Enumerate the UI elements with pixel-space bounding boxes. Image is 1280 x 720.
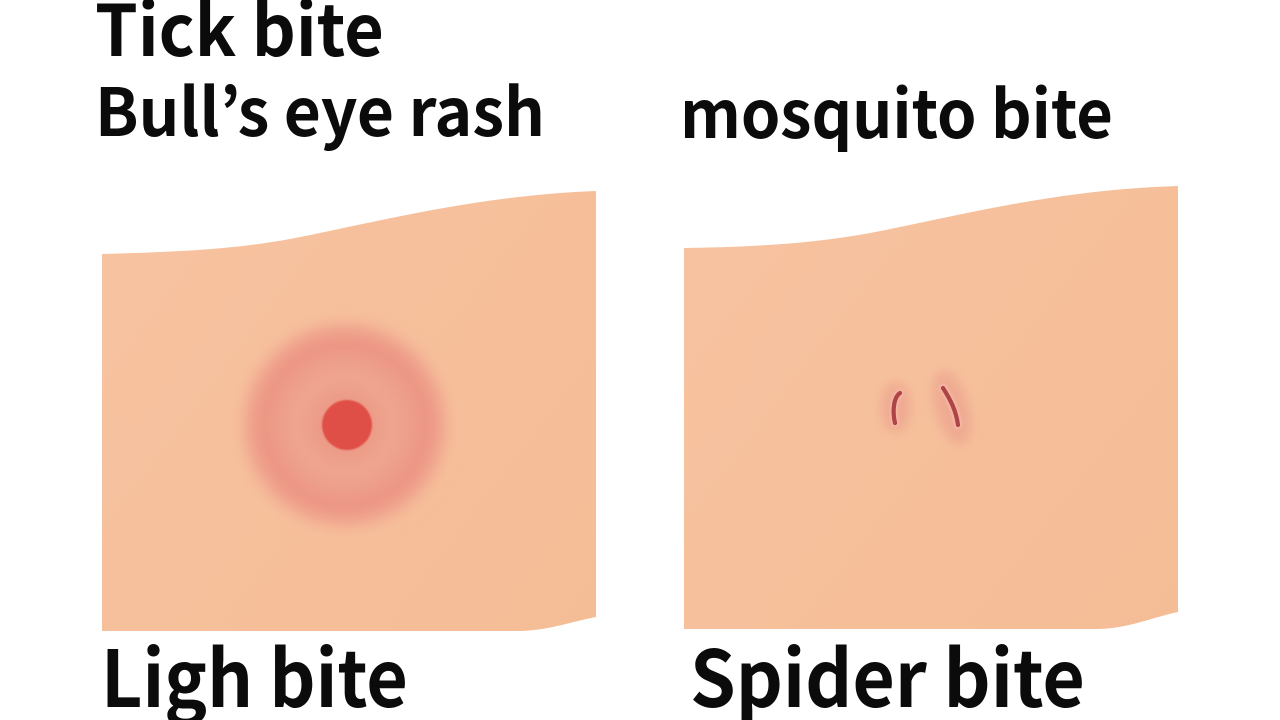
skin patch left [102, 191, 596, 631]
right bite swelling [925, 367, 979, 449]
skin patch right [684, 186, 1178, 629]
bull's eye rash [231, 311, 459, 539]
heading: Bull's eye rash: Bull’s eye rash [95, 60, 545, 156]
left bite mark [894, 393, 900, 423]
left bite halo [894, 393, 900, 423]
panel: mosquito bite skin [684, 186, 1178, 629]
right bite mark [943, 388, 958, 425]
right bite halo [943, 388, 958, 425]
panel: bull's eye rash skin [102, 191, 596, 631]
rash centre [322, 400, 372, 450]
heading: mosquito bite: mosquito bite [680, 62, 1113, 158]
left bite swelling [881, 382, 911, 432]
